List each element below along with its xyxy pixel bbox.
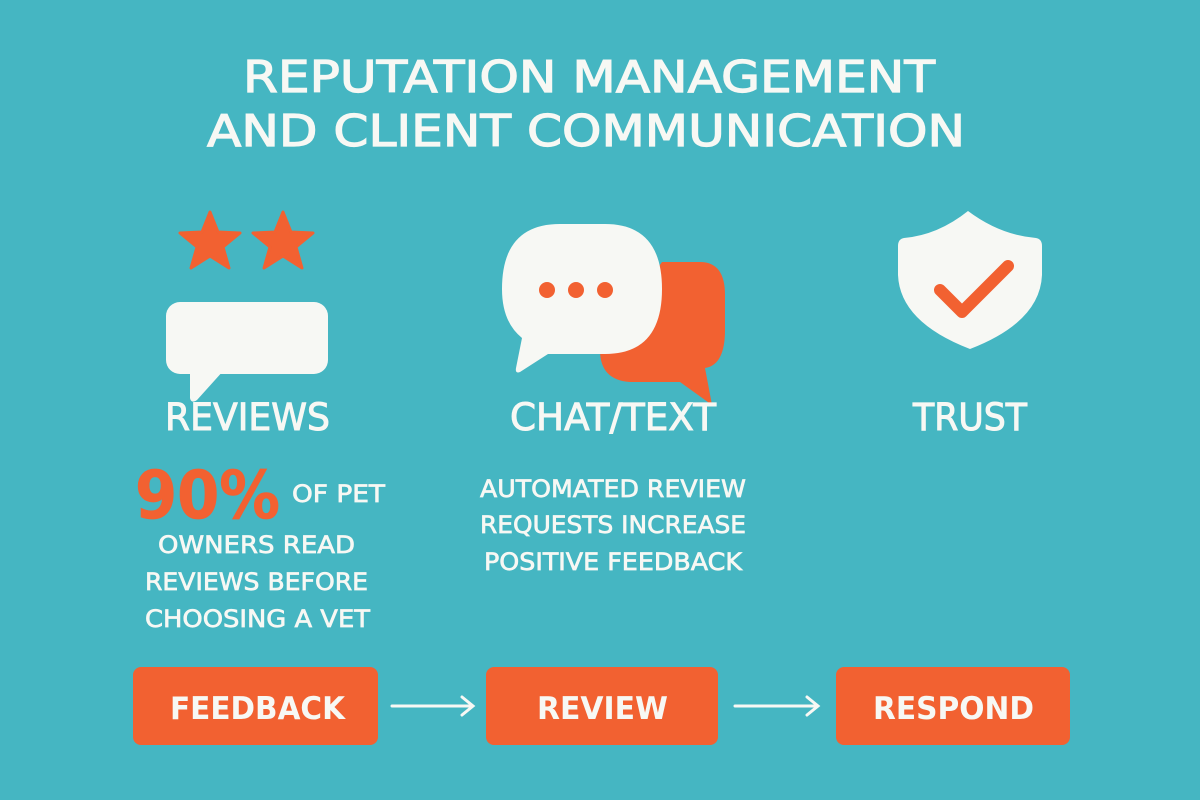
stat text: 90%	[135, 457, 280, 534]
heading: chat/text: CHAT/TEXT	[510, 396, 716, 439]
icon: stars	[180, 212, 313, 268]
description text: REQUESTS INCREASE	[480, 511, 746, 539]
button: review: REVIEW	[537, 691, 668, 727]
stat text: OF PET	[292, 480, 385, 508]
title	[207, 52, 965, 157]
panel: reviews	[135, 212, 385, 633]
button: review	[486, 667, 718, 745]
button: respond	[836, 667, 1070, 745]
arrow 1	[392, 697, 473, 715]
stat text	[135, 457, 385, 633]
icon: chat bubbles	[502, 224, 725, 405]
heading: trust: TRUST	[912, 396, 1027, 439]
heading: reviews: REVIEWS	[165, 396, 330, 439]
icon: shield	[898, 211, 1042, 349]
button: feedback: FEEDBACK	[170, 691, 346, 727]
stat text: CHOOSING A VET	[145, 605, 370, 633]
button: respond: RESPOND	[873, 691, 1034, 727]
title: AND CLIENT COMMUNICATION	[207, 106, 965, 157]
description text	[480, 475, 746, 576]
stat text: REVIEWS BEFORE	[145, 568, 368, 596]
button: feedback	[133, 667, 378, 745]
stat text: OWNERS READ	[158, 531, 355, 559]
arrow 2	[735, 697, 818, 715]
icon: review bubble	[166, 302, 328, 402]
description text: AUTOMATED REVIEW	[480, 475, 746, 503]
description text: POSITIVE FEEDBACK	[484, 548, 743, 576]
title: REPUTATION MANAGEMENT	[243, 52, 935, 103]
panel: trust	[898, 211, 1042, 439]
panel: chat/text	[480, 224, 746, 576]
